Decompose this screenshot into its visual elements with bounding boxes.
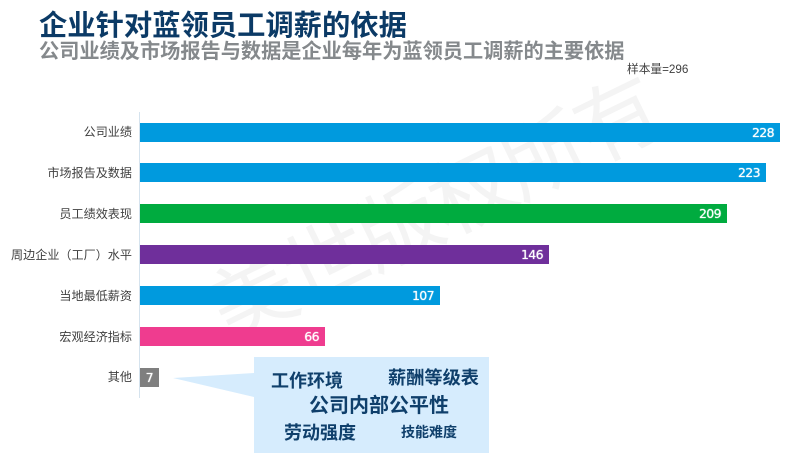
bar: 周边企业（工厂）水平 146	[140, 245, 549, 264]
row label: 其他: 其他	[108, 370, 132, 384]
sample size note: 样本量=296	[627, 63, 688, 76]
axis line	[139, 112, 140, 398]
callout item: 技能难度: 技能难度	[401, 424, 457, 440]
callout item: 公司内部公平性: 公司内部公平性	[309, 395, 449, 417]
callout shape	[174, 357, 489, 453]
bar: 当地最低薪资 107: 107	[412, 288, 434, 303]
bar: 宏观经济指标 66: 66	[304, 329, 319, 344]
row label: 周边企业（工厂）水平: 周边企业（工厂）水平	[11, 248, 132, 262]
title: 企业针对蓝领员工调薪的依据	[39, 9, 407, 41]
row label: 公司业绩: 公司业绩	[84, 125, 132, 139]
bar: 公司业绩 228: 228	[752, 125, 774, 140]
callout item: 劳动强度: 劳动强度	[284, 423, 356, 443]
bar: 员工绩效表现 209: 209	[699, 206, 721, 221]
subtitle: 公司业绩及市场报告与数据是企业每年为蓝领员工调薪的主要依据	[39, 41, 624, 63]
callout	[174, 357, 489, 453]
bar: 周边企业（工厂）水平 146: 146	[521, 247, 543, 262]
bar: 当地最低薪资 107	[140, 286, 440, 305]
row label: 员工绩效表现: 员工绩效表现	[59, 207, 132, 221]
callout item: 工作环境: 工作环境	[271, 371, 343, 391]
row label: 宏观经济指标: 宏观经济指标	[59, 330, 132, 344]
row label: 市场报告及数据: 市场报告及数据	[47, 166, 132, 180]
bar: 员工绩效表现 209	[140, 204, 727, 223]
bar: 其他 7: 7	[146, 370, 153, 385]
bar: 其他 7	[140, 368, 159, 387]
row label: 当地最低薪资: 当地最低薪资	[59, 289, 132, 303]
callout item: 薪酬等级表: 薪酬等级表	[388, 368, 479, 388]
watermark: 美世版权所有	[196, 61, 674, 359]
bar: 公司业绩 228	[140, 123, 780, 142]
bar: 市场报告及数据 223: 223	[738, 165, 760, 180]
bar: 宏观经济指标 66	[140, 327, 325, 346]
bar: 市场报告及数据 223	[140, 163, 766, 182]
